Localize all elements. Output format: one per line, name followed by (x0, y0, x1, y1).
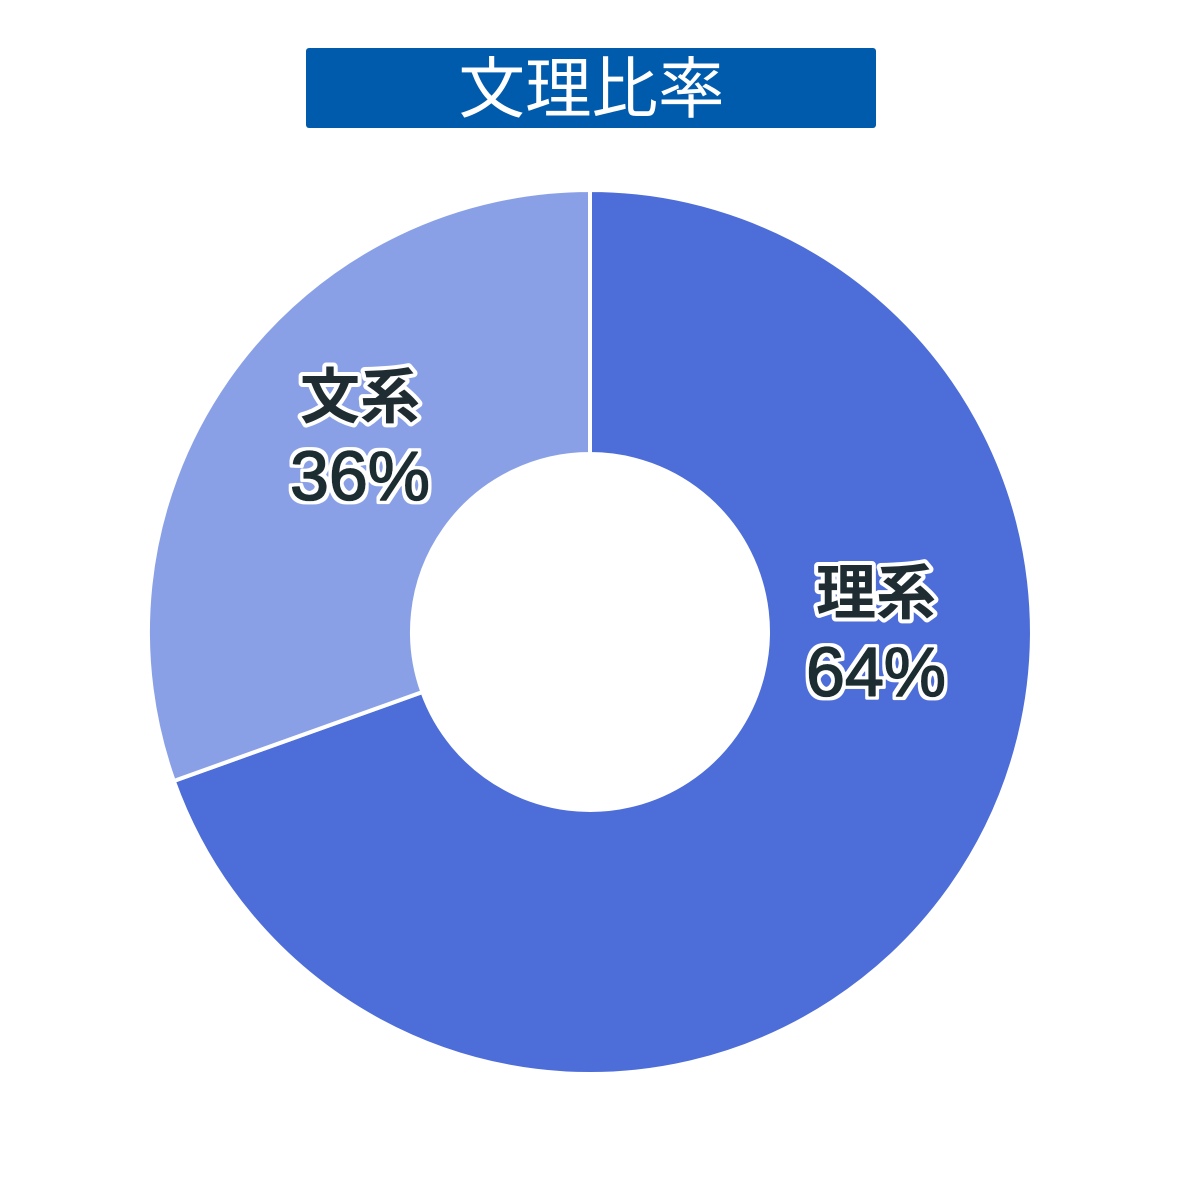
segment: 理系 64% (174, 190, 1032, 1074)
label: 理系 64% (806, 560, 946, 711)
segment: 文系 36% (148, 190, 590, 781)
label: 理系 64%: 64% (806, 633, 946, 711)
label: 文系 36%: 36% (290, 437, 430, 515)
donut chart (148, 190, 1032, 1074)
title banner (306, 48, 876, 128)
title text: 文理比率 (458, 53, 724, 127)
label: 理系 64%: 理系 (816, 560, 936, 627)
label: 文系 36%: 文系 (300, 364, 420, 431)
label: 文系 36% (290, 364, 430, 515)
